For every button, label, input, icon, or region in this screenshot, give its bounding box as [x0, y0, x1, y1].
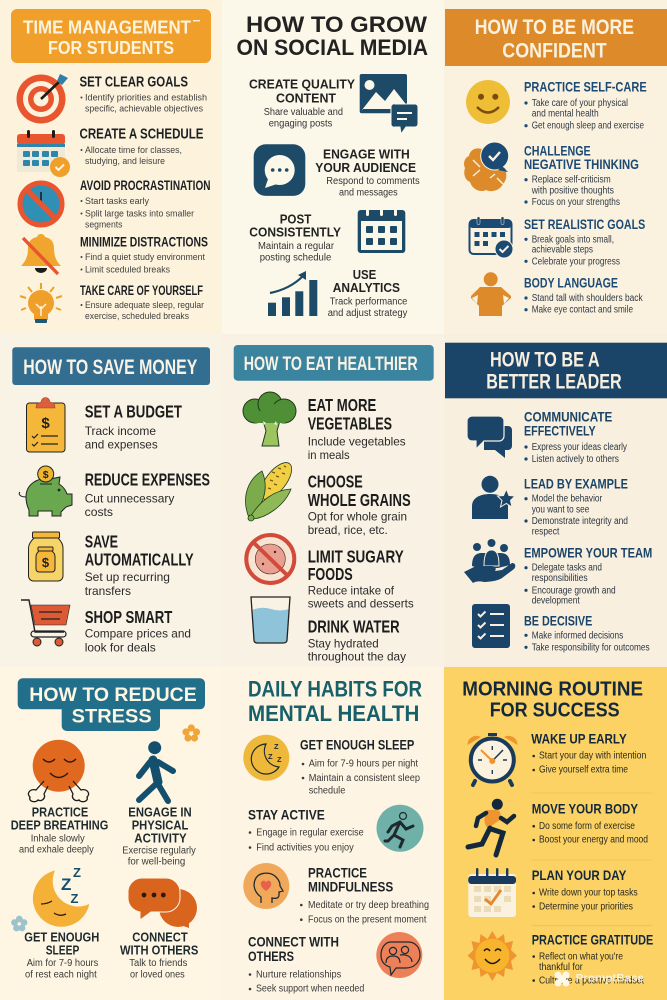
text: be decisive — [524, 612, 650, 653]
text: practice mindfulness: Meditate or try deep breathing — [308, 900, 429, 911]
text: body language: Make eye contact and smile — [532, 305, 633, 316]
text: post consistently — [249, 212, 342, 264]
text: set clear goals — [80, 74, 207, 114]
text: drink water: DRINK WATER — [308, 617, 400, 637]
heading: how to reduce stress: STRESS — [72, 706, 152, 727]
heading: time management — [11, 9, 211, 63]
text: get enough sleep — [300, 736, 420, 796]
icon: light bulb — [20, 283, 62, 323]
text: challenge negative thinking — [524, 142, 639, 208]
icon: budget clipboard: $ — [41, 415, 50, 432]
icon: image with chat bubble — [360, 74, 418, 134]
text: limit sugary foods: Reduce intake of — [308, 583, 395, 597]
text: move your body: Boost your energy and mood — [539, 835, 648, 846]
panel: how to eat healthier — [222, 334, 444, 667]
icon: calendar with check — [17, 130, 70, 177]
text: save automatically: Set up recurring — [85, 570, 170, 584]
text: communicate effectively: EFFECTIVELY — [524, 423, 596, 439]
text: practice gratitude: thankful for — [539, 962, 583, 973]
icon: smiling sun — [468, 931, 517, 981]
text: take care of yourself: Ensure adequate sleep, regular — [85, 300, 204, 311]
text: lead by example: Model the behavior — [532, 494, 603, 505]
text: shop smart: Compare prices and — [85, 627, 191, 641]
panel: how to be more confident — [444, 0, 667, 334]
icon: moon in yellow circle: Z — [277, 755, 282, 764]
text: limit sugary foods — [308, 547, 414, 610]
text: plan your day: Determine your priorities — [539, 901, 633, 912]
text: get enough sleep: Aim for 7-9 hours — [27, 958, 98, 969]
heading: how to be a better leader: BETTER LEADER — [486, 370, 622, 393]
text: take care of yourself: TAKE CARE OF YOURSELF — [80, 282, 203, 298]
icon: breathing face — [28, 740, 89, 802]
icon: sleeping moon — [33, 865, 89, 927]
heading: how to grow: HOW TO GROW — [246, 12, 427, 37]
icon: brain with check bubble — [464, 142, 509, 191]
text: post consistently: CONSISTENTLY — [249, 226, 342, 240]
text: plan your day — [532, 867, 638, 912]
heading: time management: TIME MANAGEMENT — [23, 16, 192, 38]
icon: broccoli — [243, 392, 296, 446]
icon: head with heart — [243, 863, 289, 909]
text: choose whole grains: Opt for whole grain — [308, 510, 407, 524]
icon: runner in teal circle — [376, 805, 424, 852]
text: be decisive: Make informed decisions — [532, 630, 623, 641]
text: move your body: Do some form of exercise — [539, 821, 635, 832]
text: empower your team: Delegate tasks and — [532, 563, 602, 574]
text: empower your team: responsibilities — [532, 573, 588, 584]
divider line — [532, 859, 652, 861]
text: connect with others: Talk to friends — [129, 958, 187, 969]
text: engage in physical activity: ACTIVITY — [134, 831, 187, 845]
text: take care of yourself — [80, 282, 204, 322]
heading: time management: FOR STUDENTS — [48, 37, 174, 58]
text: save automatically: AUTOMATICALLY — [85, 550, 194, 570]
panel: time management for students — [0, 0, 222, 334]
text: choose whole grains: CHOOSE — [308, 472, 363, 492]
panel: how to reduce stress — [0, 667, 222, 1000]
heading: how to grow — [236, 12, 428, 60]
text: practice gratitude — [532, 931, 653, 986]
text: set clear goals: Identify priorities and establish — [85, 92, 207, 104]
text: use analytics: Track performance — [330, 297, 408, 308]
text: stay active — [248, 806, 364, 853]
text: practice mindfulness: MINDFULNESS — [308, 879, 393, 895]
text: practice deep breathing — [11, 806, 108, 856]
text: move your body — [532, 800, 648, 846]
text: challenge negative thinking: NEGATIVE THINKING — [524, 156, 639, 172]
text: engage with your audience: and messages — [339, 187, 398, 198]
icon: savings jar — [28, 532, 63, 581]
text: connect with others: OTHERS — [248, 948, 294, 964]
text: wake up early: WAKE UP EARLY — [531, 730, 627, 746]
icon: team in open hand — [464, 539, 515, 583]
text: communicate effectively — [524, 409, 627, 465]
icon: calendar — [358, 207, 405, 253]
text: challenge negative thinking: Replace self-criticism — [532, 175, 611, 186]
text: drink water: throughout the day — [308, 649, 406, 663]
text: communicate effectively: COMMUNICATE — [524, 409, 612, 425]
text: reduce expenses: costs — [85, 505, 113, 519]
heading: how to be more confident: HOW TO BE MORE — [475, 15, 634, 39]
text: limit sugary foods: sweets and desserts — [308, 596, 414, 610]
text: lead by example: Demonstrate integrity and — [532, 516, 628, 527]
watermark: promptbase: PromptBase — [576, 973, 644, 985]
icon: growth bar chart — [268, 271, 317, 316]
text: engage with your audience: YOUR AUDIENCE — [315, 161, 416, 175]
text: body language: Stand tall with shoulders back — [532, 293, 643, 304]
heading: how to eat healthier — [234, 345, 434, 381]
text: use analytics: ANALYTICS — [333, 281, 400, 295]
text: get enough sleep: GET ENOUGH SLEEP — [300, 736, 414, 752]
icon: savings jar: $ — [42, 555, 50, 570]
icon: speech bubbles — [467, 416, 512, 458]
icon: sleeping moon: Z — [70, 891, 78, 906]
text: shop smart — [85, 607, 191, 655]
text: shop smart: look for deals — [85, 641, 156, 655]
text: challenge negative thinking: with positive thoughts — [531, 185, 614, 196]
text: create a schedule — [80, 127, 204, 167]
icon: walking figure — [139, 741, 173, 801]
text: connect with others — [248, 934, 364, 995]
text: wake up early: Give yourself extra time — [539, 765, 628, 776]
text: lead by example: you want to see — [532, 504, 590, 515]
icon: planner calendar — [468, 868, 516, 917]
text: avoid procrastination: Split large tasks into smaller — [85, 208, 194, 220]
icon: orange flower — [182, 724, 200, 742]
icon: no clock — [20, 183, 62, 225]
text: practice self-care: Take care of your physical — [532, 98, 628, 109]
text: eat more vegetables — [308, 395, 406, 462]
text: get enough sleep — [24, 931, 99, 980]
text: wake up early — [531, 730, 646, 776]
text: practice mindfulness — [300, 864, 429, 926]
icon: moon in yellow circle: Z — [274, 742, 279, 751]
text: be decisive: Take responsibility for outcomes — [532, 642, 650, 653]
watermark: promptbase — [554, 972, 644, 986]
heading: how to be more confident: CONFIDENT — [502, 38, 607, 62]
text: set realistic goals — [524, 216, 645, 267]
icon: smiley — [466, 80, 510, 124]
text: shop smart: SHOP SMART — [85, 607, 173, 627]
text: set realistic goals: achievable steps — [532, 245, 593, 256]
text: lead by example — [524, 475, 628, 537]
text: connect with others: Nurture relationships — [256, 969, 341, 980]
text: practice mindfulness: PRACTICE — [308, 864, 367, 880]
text: stay active: STAY ACTIVE — [248, 806, 325, 822]
text: engage with your audience — [315, 147, 420, 198]
text: body language: BODY LANGUAGE — [524, 274, 618, 290]
text: minimize distractions — [80, 234, 208, 276]
text: wake up early: Start your day with intention — [539, 751, 646, 762]
icon: orange chat bubbles — [128, 878, 197, 928]
icon: people in speech bubble — [376, 932, 422, 978]
text: get enough sleep: GET ENOUGH — [24, 931, 99, 945]
text: save automatically: SAVE — [85, 531, 118, 551]
text: plan your day: Write down your top tasks — [539, 888, 638, 899]
text: practice self-care: Get enough sleep and exercise — [532, 121, 644, 132]
text: body language — [524, 274, 643, 316]
text: take care of yourself: exercise, scheduled breaks — [85, 311, 189, 322]
text: practice mindfulness: Focus on the present moment — [308, 915, 426, 926]
text: get enough sleep: schedule — [309, 785, 346, 796]
text: connect with others: or loved ones — [130, 969, 185, 980]
icon: corn — [246, 458, 297, 521]
text: practice gratitude: Cultivate a positive mindset — [539, 975, 644, 986]
text: plan your day: PLAN YOUR DAY — [532, 867, 627, 883]
text: stay active: Engage in regular exercise — [256, 827, 364, 838]
divider line — [532, 925, 652, 927]
text: set realistic goals: Break goals into small, — [532, 234, 614, 245]
icon: checklist — [472, 604, 510, 648]
text: avoid procrastination: Start tasks early — [85, 196, 149, 207]
heading: how to eat healthier: HOW TO EAT HEALTHIER — [244, 353, 418, 375]
heading: morning routine — [462, 678, 643, 722]
text: eat more vegetables: VEGETABLES — [308, 413, 392, 433]
text: lead by example: LEAD BY EXAMPLE — [524, 475, 628, 491]
icon: moon in yellow circle — [243, 735, 289, 781]
heading: daily habits: DAILY HABITS FOR — [248, 677, 422, 702]
text: move your body: MOVE YOUR BODY — [532, 800, 639, 816]
heading: daily habits — [248, 677, 422, 726]
icon: no sweets — [246, 535, 294, 583]
icon: sleeping moon: Z — [73, 865, 81, 880]
text: limit sugary foods: LIMIT SUGARY — [308, 547, 404, 567]
heading: morning routine: FOR SUCCESS — [490, 699, 620, 722]
text: set clear goals: SET CLEAR GOALS — [80, 74, 188, 90]
text: connect with others: CONNECT — [132, 931, 188, 945]
text: engage in physical activity — [122, 806, 196, 867]
icon: chat app tile — [254, 144, 305, 196]
icon: budget clipboard — [26, 398, 65, 452]
text: choose whole grains: WHOLE GRAINS — [308, 490, 411, 510]
text: save automatically — [85, 531, 194, 598]
text: drink water: Stay hydrated — [308, 636, 379, 650]
text: post consistently: posting schedule — [260, 253, 332, 264]
heading: morning routine: MORNING ROUTINE — [462, 678, 643, 701]
text: drink water — [308, 617, 406, 663]
text: practice deep breathing: PRACTICE — [32, 806, 88, 820]
icon: target with arrow — [16, 74, 68, 124]
text: minimize distractions: Find a quiet study environment — [85, 252, 205, 263]
icon: piggy bank: $ — [43, 469, 49, 481]
heading: how to reduce stress: HOW TO REDUCE — [29, 685, 197, 706]
text: engage in physical activity: ENGAGE IN — [128, 806, 192, 820]
text: set a budget: and expenses — [85, 437, 158, 451]
text: eat more vegetables: Include vegetables — [308, 435, 406, 449]
text: create a schedule: CREATE A SCHEDULE — [80, 127, 204, 143]
text: challenge negative thinking: Focus on your strengths — [532, 197, 620, 208]
heading: how to reduce stress — [18, 678, 205, 731]
text: post consistently: POST — [280, 212, 312, 226]
text: lead by example: respect — [532, 526, 560, 537]
text: practice deep breathing: Inhale slowly — [31, 834, 85, 845]
text: reduce expenses: Cut unnecessary — [85, 491, 174, 505]
heading: how to save money — [12, 347, 210, 385]
icon: shopping cart — [21, 600, 70, 646]
panel: how to grow on social media — [222, 0, 444, 334]
heading: how to be a better leader — [445, 343, 667, 398]
heading: how to be a better leader: HOW TO BE A — [490, 349, 600, 372]
text: engage in physical activity: Exercise regularly — [122, 845, 196, 856]
icon: person with star — [472, 476, 515, 519]
text: practice deep breathing: DEEP BREATHING — [11, 818, 108, 832]
text: create quality content: engaging posts — [269, 119, 332, 130]
heading: how to grow: ON SOCIAL MEDIA — [236, 35, 428, 60]
icon: moon in yellow circle: Z — [268, 752, 273, 761]
divider line — [532, 792, 652, 794]
text: post consistently: Maintain a regular — [258, 241, 335, 252]
text: practice deep breathing: and exhale deeply — [19, 845, 94, 856]
text: choose whole grains: bread, rice, etc. — [308, 523, 388, 537]
text: eat more vegetables: in meals — [308, 448, 350, 462]
text: practice self-care — [524, 79, 647, 132]
heading: daily habits: MENTAL HEALTH — [248, 701, 419, 726]
panel: how to be a better leader — [444, 334, 667, 667]
icon: sleeping moon: Z — [61, 875, 71, 894]
text: use analytics: and adjust strategy — [328, 308, 407, 319]
text: practice self-care: and mental health — [532, 109, 599, 120]
text: avoid procrastination: AVOID PROCRASTINATION — [80, 178, 210, 193]
icon: alarm clock — [467, 733, 518, 785]
text: empower your team: development — [532, 596, 580, 607]
text: practice gratitude: Reflect on what you're — [539, 951, 623, 962]
text: connect with others: WITH OTHERS — [120, 943, 198, 957]
text: engage with your audience: ENGAGE WITH — [323, 147, 410, 161]
text: eat more vegetables: EAT MORE — [308, 395, 376, 415]
text: reduce expenses — [85, 470, 210, 519]
icon: blue calendar with check — [470, 217, 513, 258]
panel: how to save money — [0, 334, 222, 667]
panel: morning routine for success — [444, 667, 667, 1000]
text: minimize distractions: Limit sceduled breaks — [85, 264, 170, 276]
text: choose whole grains — [308, 472, 411, 537]
text: set a budget: Track income — [85, 424, 156, 438]
text: connect with others — [120, 931, 198, 980]
text: set clear goals: specific, achievable objectives — [85, 104, 203, 114]
text: connect with others: Seek support when needed — [256, 984, 364, 995]
text: engage with your audience: Respond to comments — [326, 176, 420, 187]
text: engage in physical activity: for well-being — [128, 856, 185, 867]
heading: how to save money: HOW TO SAVE MONEY — [23, 355, 197, 379]
text: get enough sleep: Maintain a consistent sleep — [309, 773, 420, 784]
panel: daily habits for mental health — [222, 667, 444, 1000]
text: get enough sleep: SLEEP — [46, 943, 79, 957]
text: avoid procrastination: segments — [85, 220, 123, 230]
text: communicate effectively: Express your ideas clearly — [532, 442, 627, 453]
text: connect with others: CONNECT WITH — [248, 934, 339, 950]
text: set realistic goals: Celebrate your progress — [532, 256, 620, 267]
icon: piggy bank — [19, 466, 72, 516]
icon: muted bell — [21, 234, 61, 274]
icon: blue flower — [11, 916, 27, 931]
text: challenge negative thinking: CHALLENGE — [524, 142, 591, 158]
text: use analytics: USE — [353, 268, 376, 282]
text: create a schedule: studying, and leisure — [85, 156, 165, 167]
text: limit sugary foods: FOODS — [308, 564, 353, 584]
text: empower your team — [524, 545, 652, 607]
text: get enough sleep: of rest each night — [25, 969, 97, 980]
text: create quality content: Share valuable and — [264, 107, 343, 118]
text: stay active: Find activities you enjoy — [256, 842, 354, 853]
text: avoid procrastination — [80, 178, 210, 230]
text: get enough sleep: Aim for 7-9 hours per night — [309, 759, 418, 770]
text: use analytics — [328, 268, 408, 319]
text: set a budget — [85, 402, 182, 451]
icon: running person — [468, 799, 514, 855]
text: create quality content: CONTENT — [276, 92, 336, 106]
text: reduce expenses: REDUCE EXPENSES — [85, 470, 210, 490]
text: empower your team: Encourage growth and — [532, 585, 616, 596]
text: save automatically: transfers — [85, 584, 131, 598]
text: create quality content: CREATE QUALITY — [249, 78, 356, 92]
text: minimize distractions: MINIMIZE DISTRACTIONS — [80, 234, 208, 250]
text: create a schedule: Allocate time for classes, — [85, 145, 182, 156]
text: be decisive: BE DECISIVE — [524, 612, 592, 628]
text: create quality content — [249, 78, 356, 130]
text: communicate effectively: Listen actively to others — [532, 454, 619, 465]
icon: glass of water — [251, 597, 290, 643]
text: engage in physical activity: PHYSICAL — [132, 818, 189, 832]
text: set a budget: SET A BUDGET — [85, 402, 182, 422]
icon: confident person — [471, 272, 511, 316]
heading: how to be more confident — [445, 9, 667, 66]
